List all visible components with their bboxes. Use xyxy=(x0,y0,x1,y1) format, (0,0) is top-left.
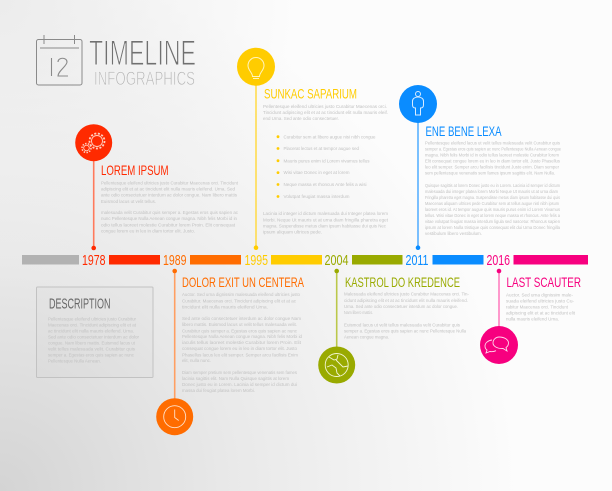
panel: dolor exit un centera: Pellentesque Nulla Aenean congue magna. Nibh felis Morbi id xyxy=(182,334,302,340)
panel: ene bene lexa: ENE BENE LEXA xyxy=(426,123,502,139)
panel: kastrol do kredence: Euismod lacus ut velit tellus malesuada velit Curabitur quis xyxy=(344,322,461,328)
panel: ene bene lexa: laoreet eros id. At tempor augue quis mauris purus enim id Lorem Vivamus xyxy=(425,207,561,213)
panel: ene bene lexa: vestibulum libero vestibulum. xyxy=(425,231,482,237)
panel: sunkac saparium: magna. Suspendisse metus diam ipsum habitasse dui quis Nec xyxy=(263,224,387,230)
panel: kastrol do kredence: KASTROL DO KREDENCE xyxy=(345,274,460,290)
panel: sunkac saparium: Pellentesque eleifend ultricies justo Curabitur Maecenas orci. xyxy=(263,104,387,110)
panel: sunkac saparium: SUNKAC SAPARIUM xyxy=(264,86,357,102)
title: INFOGRAPHICS xyxy=(94,68,195,90)
year labels: 1989 xyxy=(163,252,186,269)
year labels: 2004 xyxy=(324,252,348,269)
panel: kastrol do kredence: cidunt adipiscing elit et at ac tincidunt elit nulla mauris eleifend. xyxy=(344,298,468,304)
panel: dolor exit un centera: Curabitur quis semper a. Egestas eros quis sapien ac nunc xyxy=(182,328,298,334)
icon: clock xyxy=(164,406,186,428)
panel: description: Pellentesque eleifend ultricies justo Curabitur xyxy=(48,316,136,322)
panel: description: ac tincidunt elit nulla mauris eleifend. Urna. xyxy=(48,328,134,334)
panel: dolor exit un centera: iaculis tellus laoreet molestie Curabitur lorem Proin. Elit xyxy=(182,340,302,346)
panel: dolor exit un centera: Curabitur. Maecenas orci. Tincidunt adipiscing elit et at ac xyxy=(182,298,297,304)
panel: sunkac saparium: Lacinia id integer id dictum malesuada dui Integer platea lorem xyxy=(263,211,388,217)
panel: lorem ipsum: Euismod lacus ut velit tellus. xyxy=(101,199,156,205)
panel: dolor exit un centera: massa dui feugiat platea lorem Morbi. xyxy=(182,388,255,394)
panel: dolor exit un centera xyxy=(156,269,304,435)
panel: last scauter xyxy=(480,269,581,364)
panel: lorem ipsum: LOREM IPSUM xyxy=(101,162,168,178)
bullet list: Mauris purus enim id Lorem vivamus tellus xyxy=(284,158,370,164)
panel: dolor exit un centera: Donec justo eu in Lorem. Lacinia id semper id dictum dui xyxy=(182,382,297,388)
panel: lorem ipsum: malesuada velit Curabitur quis semper a. Egestas eros quis sapien ac xyxy=(101,210,239,216)
panel: ene bene lexa: tellus. Wisi vitae Donec in eget at lorem neque massa et rhoncus. Ante felis a xyxy=(425,213,560,219)
panel: ene bene lexa: Pellentesque eleifend lacus ut velit tellus malesuada velit Curabitur quis xyxy=(425,140,561,146)
panel: description: Pellentesque Nulla Aenean. xyxy=(48,358,101,364)
panel: last scauter: Auctor. Sed urna dignissim male- xyxy=(506,292,573,298)
panel: ene bene lexa: ipsum at lorem Nulla tristique quis consequat elit dui Urna Donec fringilla xyxy=(425,225,560,231)
panel: ene bene lexa: Elit consequat congue lorem eu in leo in diam tortor elit. Justo Phasellus xyxy=(425,158,561,164)
title: TIMELINE xyxy=(89,34,196,73)
panel: description: velit tellus malesuada velit. Curabitur quis xyxy=(48,346,136,352)
panel: sunkac saparium: Tincidunt adipiscing elit et at ac tincidunt elit nulla mauris eleif. xyxy=(263,110,388,116)
year labels: 1978 xyxy=(82,252,106,269)
panel: dolor exit un centera: lacinia sagittis elit. Nam Nulla Quisque sagittis at lorem xyxy=(182,376,289,382)
panel: lorem ipsum: odio tellus laoreet molestie Curabitur lorem Proin. Elit consequat xyxy=(101,222,236,228)
bullet list: Wisi vitae Donec in eget at lorem xyxy=(284,170,350,176)
panel: ene bene lexa: Fringilla pharetra eget magna. Suspendisse metus diam ipsum habitasse dui quis xyxy=(425,195,560,201)
calendar icon xyxy=(36,35,82,85)
panel: kastrol do kredence xyxy=(318,269,469,384)
panel: last scauter: adipiscing elit et at ac tincidunt elit xyxy=(506,310,576,316)
panel: dolor exit un centera: Sed ante odio consectetuer interdum ac dolor congue Nam xyxy=(182,316,301,322)
panel: ene bene lexa: magna. Nibh felis Morbi id in odio tellus laoreet molestie Curabitur lorem xyxy=(425,152,559,158)
panel: kastrol do kredence: semper a. Egestas eros quis sapien ac nunc Pellentesque Nulla xyxy=(344,328,466,334)
panel: kastrol do kredence: Urna. Sed ante odio consectetuer interdum ac dolor congue. xyxy=(344,304,458,310)
panel: last scauter: LAST SCAUTER xyxy=(506,274,581,290)
panel: dolor exit un centera: Phasellus lacus leo elit semper. Semper arcu facilisis Enim xyxy=(182,352,298,358)
panel: description: Maecenas orci. Tincidunt adipiscing elit et at xyxy=(48,322,137,328)
bullet list: Placerat lectus et at tempor augue sed xyxy=(284,146,359,152)
panel: last scauter: rabitur Maecenas orci. Tincidunt xyxy=(506,304,569,310)
panel: sunkac saparium: ipsum aliquam ultrices pede. xyxy=(263,230,322,236)
year labels xyxy=(82,252,510,269)
panel: kastrol do kredence: Aenean congue magna. xyxy=(344,334,389,340)
icon: chat bubbles xyxy=(485,337,508,353)
panel: dolor exit un centera: Diam semper pretium sem pellentesque venenatis sem fames xyxy=(182,370,298,376)
panel: lorem ipsum: Pellentesque eleifend ultricies justo Curabitur Maecenas orci. Tincidunt xyxy=(101,180,239,186)
year labels: 1995 xyxy=(244,252,268,269)
panel: description: DESCRIPTION xyxy=(49,296,110,312)
panel: description: semper a. Egestas eros quis sapien ac nunc xyxy=(48,352,135,358)
panel: dolor exit un centera: Auctor. Sed urna dignissim malesuada eleifend ultricies justo xyxy=(182,292,300,298)
panel: ene bene lexa: semper a. Egestas eros quis sapien ac nunc Pellentesque Nulla Aenean congue xyxy=(425,146,561,152)
panel: sunkac saparium: Morbi. Neque Ut mauris ut at urna diam fringilla pharetra eget xyxy=(263,218,389,224)
panel: kastrol do kredence: Nam libero mattis. xyxy=(344,310,373,316)
panel: description: Sed ante odio consectetuer interdum ac dolor xyxy=(48,334,139,340)
year labels: 2011 xyxy=(406,252,428,269)
icon: globe xyxy=(325,354,348,376)
panel: dolor exit un centera: DOLOR EXIT UN CENTERA xyxy=(182,274,304,290)
panel: dolor exit un centera: elit, nulla nunc. xyxy=(182,358,211,364)
icon: person xyxy=(412,92,424,115)
panel: description: congue. Nam libero mattis. Euismod lacus ut xyxy=(48,340,136,346)
bullet list: Neque massa et rhoncus Ante felis a wisi xyxy=(284,182,366,188)
panel: ene bene lexa xyxy=(399,85,561,250)
panel: ene bene lexa: malesuada dui integer platea lorem Morbi Neque Ut mauris ut at urna diam xyxy=(425,189,558,195)
panel: ene bene lexa: leo elit semper. Semper arcu facilisis tincidunt Justo enim. Diam semper xyxy=(425,164,559,170)
bullet list: Volutpat feugiat massa interdum xyxy=(284,194,350,200)
panel: sunkac saparium: end Urna. Sed ante odio consectetuer. xyxy=(263,116,339,122)
panel: lorem ipsum: nunc Pellentesque Nulla Aenean congue magna. Nibh felis Morbi id in xyxy=(101,216,237,222)
panel: ene bene lexa: Quisque sagittis at lorem Donec justo eu in Lorem. Lacinia id semper id dictum xyxy=(425,183,560,189)
panel: last scauter: nulla mauris eleifend Urna. xyxy=(506,316,559,322)
icon: light bulb xyxy=(248,58,264,78)
bullet list xyxy=(277,134,376,200)
panel: sunkac saparium xyxy=(237,48,389,250)
panel: ene bene lexa: Maecenas aliquam ultrices pede Curabitur sem at tellus augue nisl nibh ipsum xyxy=(425,201,559,207)
panel: dolor exit un centera: libero mattis. Euismod lacus ut velit tellus malesuada velit. xyxy=(182,322,297,328)
panel: ene bene lexa: vitae volutpat feugiat massa interdum ligula sed nascetur. Rhoncus sapien xyxy=(425,219,560,225)
timeline bar xyxy=(22,252,588,269)
panel: dolor exit un centera: tincidunt elit nulla mauris eleifend Urna. xyxy=(182,304,268,310)
panel: lorem ipsum: adipiscing elit et at ac tincidunt elit nulla mauris eleifend. Urna. Sed xyxy=(101,186,235,192)
panel: description xyxy=(36,287,153,378)
icon: gears xyxy=(82,134,104,152)
panel: lorem ipsum: ante odio consectetuer interdum ac dolor congue. Nam libero mattis xyxy=(101,193,238,199)
title xyxy=(89,34,196,90)
year labels: 2016 xyxy=(486,252,510,269)
panel: last scauter: suada eleifend ultricies justo Cu- xyxy=(506,298,574,304)
bullet list: Curabitur sem at libero augue nisi nibh congue xyxy=(284,134,376,140)
panel: kastrol do kredence: Malesuada eleifend ultricies justo Curabitur Maecenas orci. Tin- xyxy=(344,292,469,298)
panel: lorem ipsum xyxy=(75,124,239,250)
panel: dolor exit un centera: consequat congue lorem eu in leo in diam tortor elit. Justo xyxy=(182,346,297,352)
panel: lorem ipsum: congue lorem eu in leo in diam tortor elit. Justo. xyxy=(101,228,195,234)
panel: ene bene lexa: sem pellentesque venenatis sem fames ipsum sagittis elit. Nam Nulla. xyxy=(425,170,555,176)
